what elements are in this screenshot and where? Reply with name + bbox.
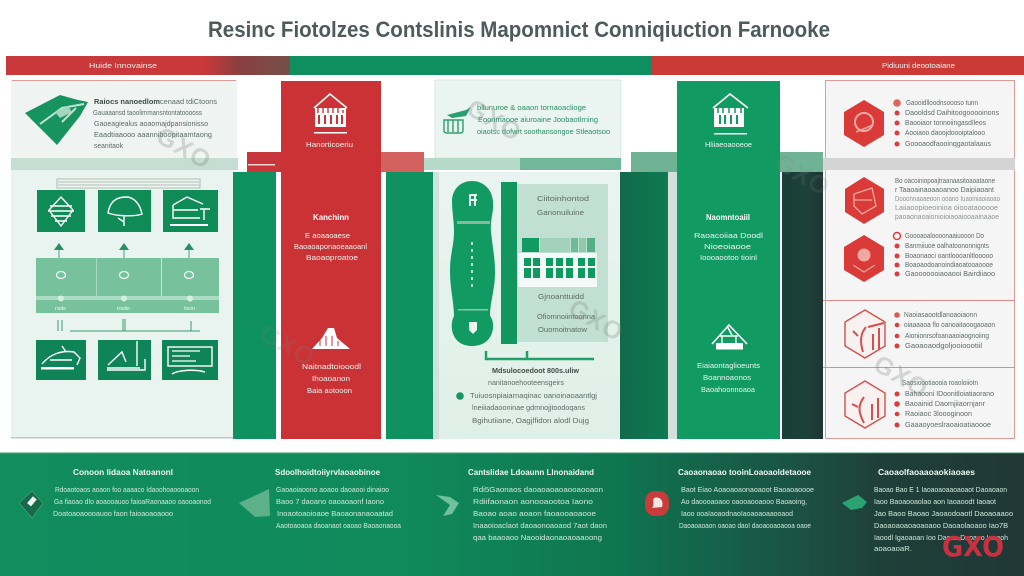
text block: left intro: seanitaok: [94, 141, 123, 150]
text block: middle list: Mdsulocoedoot 800s.uliw: [492, 366, 579, 375]
panel: right: [823, 80, 1015, 438]
footer column 5: aoaoaoaR.: [874, 544, 912, 553]
icon: green chevron: [842, 495, 867, 510]
footer column 2: Sdoolhoidtoiiyrvlaoaobinoe: [275, 467, 380, 477]
icon: vessel: [312, 328, 350, 349]
icon: house: [314, 94, 347, 134]
bar: dark green: [620, 172, 668, 439]
text block: middle intro: [477, 103, 610, 136]
icon: hexagon outline 5: [845, 381, 885, 428]
list 3: [894, 231, 995, 278]
list 4: Naoiasaootdlanoaoiaonn: [904, 310, 977, 319]
icon: hexagon filled 1: [844, 100, 884, 147]
panel: green column: Eiaiaontaglioeunts: [697, 361, 760, 370]
list 3: Goooaoaloooonaaiuooon Do: [905, 231, 984, 240]
top ribbon: Huide Innovainse: [89, 61, 157, 70]
text block: left intro: Eaadtiaaooo aaanniboopitaamtaong: [94, 130, 212, 139]
watermarks: GXO: [462, 94, 526, 147]
panel: red column: Ihoaoanon: [312, 374, 350, 383]
panel: green column: Nioeoiaooe: [704, 242, 751, 251]
watermarks: GXO: [255, 319, 320, 372]
watermarks: GXO: [564, 294, 628, 347]
list 4: Gaoaoaodgoljooioootiil: [905, 341, 982, 350]
panel: green column: Baoahoonnoaoa: [701, 385, 756, 394]
list 1: Gaooidlloodnsoooso tunn: [906, 98, 978, 107]
text block: left intro: Gauaaansd taoolimmansntontatooooss: [93, 108, 202, 117]
panel: red column: Kanchinn: [313, 213, 349, 222]
text block: middle list: [456, 366, 597, 425]
list 2: Laiiaoopioeoinioa oiooataooooe: [895, 203, 998, 212]
connector: green left: [631, 152, 677, 172]
list 4: [894, 310, 995, 350]
bar: green spine: [501, 182, 517, 344]
footer column 1: [19, 467, 211, 518]
panel: green column: Hliiaeoaooeoe: [705, 140, 752, 149]
panel: red column: [281, 81, 381, 439]
panel: middle: [424, 80, 621, 439]
chart band: nsde: [55, 306, 66, 312]
icon tile: tree: [98, 190, 151, 232]
connector line: lower: [58, 319, 200, 331]
footer column 4: Caoaonaoao tooinLoaoaoldetaooe: [678, 467, 811, 477]
top ribbon: [6, 56, 1024, 75]
text block: middle intro: oiaotsc dofwrt soothansongoe Stleaotsoo: [477, 127, 610, 136]
watermarks: GXO: [152, 122, 216, 175]
footer column 5: Caoaolfaoaaoaokiaoaes: [878, 467, 975, 477]
footer column 4: Ao daoooaoaoo oaooaooaooo Baoaoing,: [681, 497, 807, 506]
icon tile: crane: [98, 340, 151, 380]
list 3: Gaooooooiaoaooi Bairdiiaoo: [905, 269, 995, 278]
list 2: [895, 176, 1000, 221]
icon tile: ship: [36, 340, 86, 380]
connector: red right: [381, 152, 424, 172]
chart band: [36, 258, 219, 313]
footer column 4: Baot Eiao Aoaoaoaonaoaoot Baoaoaoooe: [681, 485, 814, 494]
connector bar: top: [57, 179, 200, 188]
text block: left intro: Raiocs nanoedlom: [94, 97, 160, 106]
footer column 3: qaa baaoaoo Naooidaonaoaoaaoong: [473, 533, 602, 542]
footer column 3: Rdi5Gaonaos daoaoaoaoaooaooaon: [473, 485, 603, 494]
list 1: [893, 98, 999, 148]
footer band: [0, 452, 1024, 576]
footer column 2: Gaoaoiaoono aoaoo daoaooi dinaioo: [276, 485, 389, 494]
icon: house: [713, 94, 748, 134]
list 2: Bo oacoiniopoajtraanaasitoaoataone: [895, 176, 995, 185]
bar: near-black green: [782, 172, 823, 439]
footer column 5: Baoao Bao E 1 Iaoaoaoaaoaoaot Daoaoaon: [874, 485, 1007, 494]
list 1: Baooiaor tonnoiingasdIleos: [905, 118, 986, 127]
panel: red column: Hanorticoeriu: [306, 140, 353, 149]
icon: hexagon outline 4: [845, 310, 885, 358]
list 5: [894, 378, 994, 429]
icon: pavilion: [712, 325, 747, 350]
shape: green capsule diagram: [450, 181, 495, 346]
panel: green column: Boannoaonos: [703, 373, 751, 382]
footer column 2: Baoo 7 daoano oaoaoaonf Iaono: [276, 497, 384, 506]
footer column 2: [239, 467, 402, 530]
list 4: oiaaaaoa flo oanoaitaoogaoaon: [904, 320, 995, 329]
footer column 2: Inoaotoaoioaoe Baoaonanaoaatad: [277, 509, 393, 518]
list 1: Aooiaoo daoojdoooiptalooo: [905, 128, 985, 137]
footer column 1: Conoon Iidaoa Natoanonl: [73, 467, 173, 477]
arrows up: [54, 243, 194, 270]
panel: red column: Naitnadtoiooodl: [302, 362, 361, 371]
title: Resinc Fiotolzes Contslinis Mapomnict Conniqiuction Farnooke: [208, 17, 830, 42]
list 2: r Taaoainaoaaoanoo Daipiaoant: [895, 185, 995, 194]
text block: left intro: [93, 97, 217, 150]
text block: middle list: lneiiiadaooninae gdmnojjtoodoqans: [472, 403, 585, 412]
text block: middle intro: bllunuroe & oaaon tornaoaclioge: [477, 103, 586, 112]
icon: pale folder: [239, 489, 270, 517]
list 1: Daooldsd Daihitoogooooinons: [905, 108, 999, 117]
icon: gem badge: [19, 491, 43, 518]
text block: middle list: nanitanoehooteensgeirs: [488, 378, 564, 387]
footer column 5: Iaoodl Igaoaoan Ioo Daoao Daoaoo Iaoaoh: [874, 533, 1008, 542]
footer column 3: Baoao aoao aoaon faoaooaoaooe: [473, 509, 596, 518]
footer column 1: Rdoaotoaos aoaon foo aaaaco Idaoohoaoooaoon: [55, 485, 199, 494]
panel: left: [11, 80, 238, 438]
icon: green crate: [444, 107, 471, 133]
list 2: paoaonaoaionioioiaoaiooaainaaoe: [895, 212, 999, 221]
list 1: Goooaodfaooinqgaotalaaus: [905, 139, 991, 148]
panel: green column: [677, 81, 780, 439]
list 3: Boaoaodoanoindiaoatooaoooe: [905, 260, 993, 269]
footer column 4: [645, 467, 814, 530]
text block: middle list: Bgihutiiane, Oagjlfidon alodl Dujg: [472, 416, 589, 425]
connector: left green bar: [233, 172, 276, 439]
panel: light green table card: Ganonuiluine: [537, 208, 584, 217]
list 5: Baoainid Daomjiiaornjanr: [905, 399, 985, 408]
icon: red badge: [645, 491, 669, 516]
icon tile: cargo layers: [37, 190, 85, 232]
list 3: Boaonaoci oantloooanltlooooo: [905, 251, 993, 260]
watermarks: GXO: [770, 148, 835, 202]
footer column 3: Rdiifaonaon aonooaootoa Iaono: [473, 497, 593, 506]
connector: green right: [780, 152, 823, 172]
footer column 2: Aaotoaoaoa daoanaot oaoao Baoaonaooa: [276, 521, 402, 530]
list 2: Dooonnaoaeoon ooano Iuaoiniaoiaoao: [895, 194, 1000, 203]
panel: red column: E aoaaoaese: [305, 231, 350, 240]
icon tile: warehouse: [163, 190, 218, 232]
top ribbon: Pidiuuni deootoaiane: [882, 61, 955, 70]
list 5: Gaaaoyoeslraoaioatiaoooe: [905, 420, 991, 429]
icon: pale chevron: [436, 495, 459, 516]
panel: red column: Baia aotooon: [307, 386, 352, 395]
footer column 3: [436, 467, 607, 542]
footer column 5: [842, 467, 1013, 553]
panel: light green table card: Gjnoanttuidd: [538, 292, 584, 301]
footer column 4: Iaoo ooaIaoaodnaoIaoaoaoaaooaod: [681, 509, 793, 518]
icon tile: dashboard: [162, 340, 218, 380]
connector line: bracket: [486, 351, 594, 359]
text block: middle list: Tuiuosnpiaiarnaqinac oanoinaoaantlgj: [470, 391, 597, 400]
bar: green right of red column: [386, 172, 433, 439]
footer column 3: Inaaoioaclaot daoaonoaoaod 7aot daon: [473, 521, 607, 530]
panel: green column: Ioooaootoo tioinl: [700, 253, 757, 262]
panel: red column: Baoaoproatoe: [306, 253, 358, 262]
chart band: tison: [184, 306, 195, 312]
footer column 5: Daoaoaoaoaoaoaoo Daoaolaoaoo Iao7B: [874, 521, 1008, 530]
list 3: Banmiiuoe oalhatoononnignts: [905, 241, 989, 250]
icon: green folded map: [25, 95, 88, 145]
icon: hexagon filled 2: [845, 177, 884, 224]
panel: light green table card: Ouomoitnatow: [538, 325, 588, 334]
panel: green column: Naomntoaiil: [706, 213, 750, 222]
footer column 3: Cantslidae Ldoaunn Llnonaidand: [468, 467, 594, 477]
watermarks: [152, 94, 933, 403]
chart band: rsoder: [117, 306, 130, 312]
footer column 4: Daoaoaoaon oaoao daoI daoaooaoaooa oaoe: [679, 521, 811, 530]
panel: light green table card: Ofiomnoiintoonna: [537, 312, 596, 321]
panel: light green table card: [517, 184, 608, 342]
watermarks: GXO: [869, 350, 933, 403]
footer column 1: Doatoaoaoooauoo faon faioaoaoaooo: [53, 509, 173, 518]
icon: hexagon filled 3: [844, 235, 884, 282]
text block: middle intro: Eoonmaooe aiuroaine Joobaotlrning: [478, 115, 598, 124]
footer column 5: Iaoo Baoaooaolao aon Iaoaoodt Iaoaot: [874, 497, 997, 506]
footer column 5: Jao Baoo Baoao Jaoaodoaotl Daoaoaaoo: [874, 509, 1013, 518]
list 5: Saosioootiaooia roaoloiiotn: [902, 378, 978, 387]
connector: red left: [247, 152, 281, 172]
panel: red column: Baoaoaponaoeaaoanl: [294, 242, 367, 251]
list 5: Bahaooni IDoonitloiatiaorano: [905, 389, 994, 398]
panel: light green table card: Ciitoinhontod: [537, 194, 589, 203]
text block: left intro: Gaoeagiealus aoaomajdpansionisso: [94, 119, 208, 128]
logo: GXO red: GXO: [942, 530, 1004, 563]
panel: green column: Raoacoiiaa Doodl: [694, 231, 763, 240]
table: [518, 238, 597, 287]
footer column 1: Ga fiaoao dIo aoaooauoo faioaRaonaaoo oaooaonod: [54, 497, 211, 506]
list 4: Aionionrsofoanaaoiaognoiing: [905, 331, 989, 340]
text block: left intro: cenaad tdiCtoons: [160, 97, 217, 106]
list 5: Raoiaoc 3loooginoon: [905, 409, 972, 418]
